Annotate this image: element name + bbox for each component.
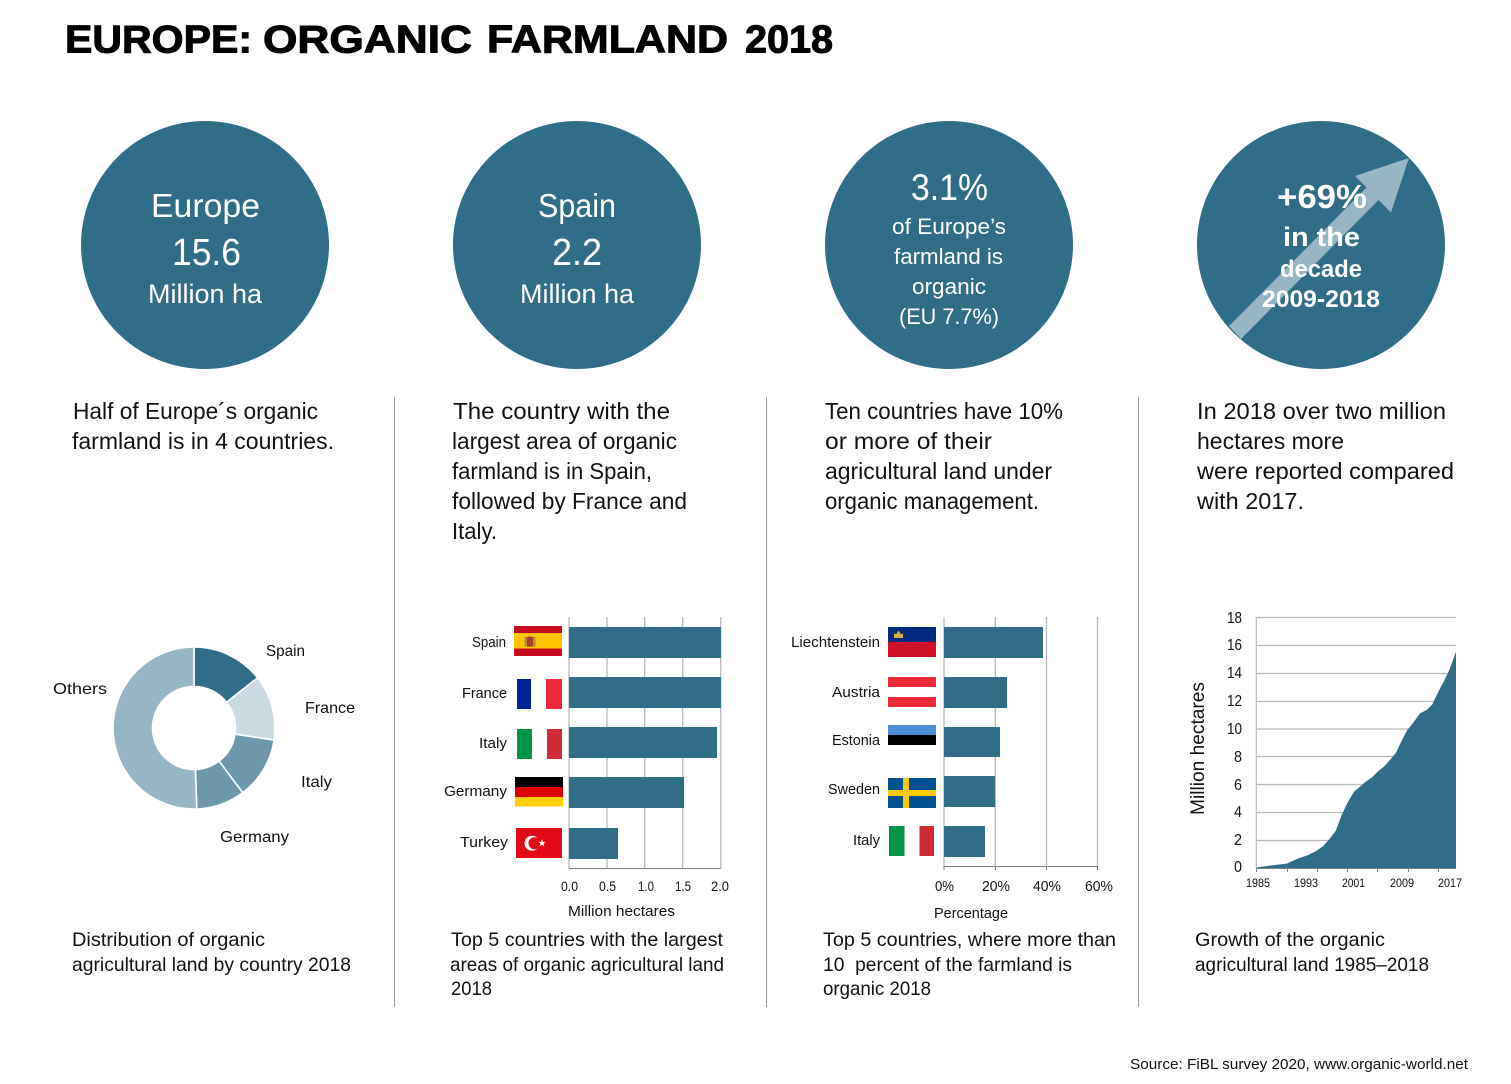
bar chart: top 5 by share of farmland: Liechtenstein xyxy=(791,635,880,651)
icon: upward arrow xyxy=(1229,158,1409,339)
caption: distribution: agricultural land by country 2018 xyxy=(72,954,351,976)
area chart: growth 1985-2018: 8 xyxy=(1234,749,1242,766)
bar chart: top 5 by share of farmland: Italy xyxy=(853,833,881,849)
caption: growth xyxy=(1195,929,1429,976)
area chart: growth 1985-2018: 6 xyxy=(1234,777,1242,794)
bar chart: top 5 by share of farmland: Austria xyxy=(832,685,881,701)
flag: Italy xyxy=(889,826,934,856)
bar chart: top 5 by share of farmland: 40% xyxy=(1033,879,1061,895)
bar chart: top 5 largest area xyxy=(444,617,729,920)
text block: two million hectares more: with 2017. xyxy=(1196,488,1304,514)
caption: top 5 share: Top 5 countries, where more than xyxy=(823,929,1116,951)
bar chart: top 5 largest area: 1.0 xyxy=(638,879,654,894)
flag: Germany xyxy=(515,777,563,806)
text block: Spain largest area: farmland is in Spain, xyxy=(452,458,652,484)
bar chart: top 5 by share of farmland xyxy=(791,617,1113,922)
bar chart: top 5 largest area: 0.5 xyxy=(599,879,616,894)
caption: top 5 largest: areas of organic agricultural land xyxy=(450,954,724,976)
bar chart: top 5 by share of farmland: Estonia xyxy=(832,733,881,749)
area chart: growth 1985-2018: 2001 xyxy=(1342,876,1365,890)
flag: Sweden xyxy=(888,778,936,808)
bar chart: top 5 largest area: Germany xyxy=(444,784,508,800)
circle: 3.1% of Europe's farmland: farmland is xyxy=(894,244,1003,269)
caption: top 5 largest: 2018 xyxy=(451,978,492,1000)
title: FARMLAND xyxy=(487,19,728,62)
text block: Spain largest area: Italy. xyxy=(452,518,497,544)
circle: 3.1% of Europe's farmland: organic xyxy=(912,274,986,299)
circle: +69% growth with arrow: +69% xyxy=(1277,178,1367,215)
caption: top 5 share xyxy=(823,929,1116,1000)
circle: 3.1% of Europe's farmland: 3.1% xyxy=(911,167,988,208)
circle: +69% growth with arrow xyxy=(1197,121,1445,369)
flag: Italy xyxy=(517,729,562,759)
area chart: growth 1985-2018: 2017 xyxy=(1438,876,1462,890)
circle: 3.1% of Europe's farmland xyxy=(825,121,1073,369)
bar chart: top 5 largest area: 0.0 xyxy=(561,879,578,894)
area chart: growth 1985-2018 xyxy=(1188,610,1462,890)
caption: distribution: Distribution of organic xyxy=(72,929,265,951)
bar chart: top 5 largest area: Spain xyxy=(472,635,506,651)
text block: half of Europe's farmland: Half of Europe´s organic xyxy=(73,398,318,424)
flag: Liechtenstein xyxy=(888,627,936,657)
circle: +69% growth with arrow: decade xyxy=(1280,256,1362,283)
donut chart: distribution by country xyxy=(53,643,355,846)
caption: top 5 share: organic 2018 xyxy=(823,978,931,1000)
area chart: growth 1985-2018: 10 xyxy=(1227,721,1242,738)
area chart: growth 1985-2018: 12 xyxy=(1227,693,1242,710)
flag: Austria xyxy=(888,677,936,707)
circle: Europe 15.6 million ha: 15.6 xyxy=(172,232,241,274)
bar chart: top 5 largest area: Italy xyxy=(479,736,508,752)
bar chart: top 5 by share of farmland: 0% xyxy=(935,879,954,895)
segment: Germany xyxy=(195,761,243,809)
bar chart: top 5 largest area: Turkey xyxy=(460,835,509,851)
flag: Turkey xyxy=(516,828,562,858)
segment: France xyxy=(227,678,275,740)
text block: ten countries: Ten countries have 10% xyxy=(825,398,1063,424)
circle: Europe 15.6 million ha xyxy=(81,121,329,369)
text block: half of Europe's farmland: farmland is in 4 countries. xyxy=(72,428,334,454)
circle: +69% growth with arrow: 2009-2018 xyxy=(1262,286,1380,313)
bar chart: top 5 largest area: France xyxy=(462,686,507,702)
title: ORGANIC xyxy=(263,19,472,62)
text block: Spain largest area: largest area of organic xyxy=(452,428,677,454)
circle: Spain 2.2 million ha: Spain xyxy=(538,187,616,224)
text block: two million hectares more: hectares more xyxy=(1197,428,1344,454)
area chart: growth 1985-2018: Million hectares xyxy=(1188,682,1209,815)
text block: ten countries: agricultural land under xyxy=(825,458,1052,484)
caption: top 5 share: 10 percent of the farmland is xyxy=(823,954,1072,976)
circle: 3.1% of Europe's farmland: (EU 7.7%) xyxy=(899,304,999,329)
circle: Spain 2.2 million ha: 2.2 xyxy=(552,232,602,274)
bar chart: top 5 by share of farmland: Percentage xyxy=(934,906,1008,922)
area chart: growth 1985-2018: 2009 xyxy=(1390,876,1414,890)
area chart: growth 1985-2018: 0 xyxy=(1234,859,1242,876)
flag: Estonia xyxy=(888,725,936,745)
text block: Spain largest area: The country with the xyxy=(453,398,670,424)
source: Source: FiBL survey 2020, www.organic-world.net xyxy=(1130,1056,1469,1073)
donut chart: distribution by country: Spain xyxy=(266,643,305,660)
text block: Spain largest area xyxy=(452,398,687,544)
flag: France xyxy=(517,679,562,709)
caption: growth: Growth of the organic xyxy=(1195,929,1385,951)
text block: ten countries: or more of their xyxy=(825,428,992,454)
text block: ten countries xyxy=(825,398,1063,514)
segment: Others xyxy=(113,647,197,809)
title: 2018 xyxy=(745,19,833,62)
circle: Spain 2.2 million ha xyxy=(453,121,701,369)
text block: two million hectares more xyxy=(1196,398,1454,514)
area chart: growth 1985-2018: 2 xyxy=(1234,832,1242,849)
donut chart: distribution by country: Others xyxy=(53,681,107,698)
caption: top 5 largest xyxy=(450,929,724,1000)
circle: Europe 15.6 million ha: Million ha xyxy=(148,279,263,309)
bar chart: top 5 largest area: 2.0 xyxy=(711,879,729,894)
donut chart: distribution by country: France xyxy=(305,700,355,717)
text block: half of Europe's farmland xyxy=(72,398,334,454)
text block: two million hectares more: In 2018 over two million xyxy=(1197,398,1446,424)
area chart: growth 1985-2018: 1993 xyxy=(1294,876,1318,890)
donut chart: distribution by country: Germany xyxy=(220,829,289,846)
circle: +69% growth with arrow: in the xyxy=(1283,222,1360,252)
caption: distribution xyxy=(72,929,351,976)
area chart: growth 1985-2018: 4 xyxy=(1234,804,1242,821)
segment: Italy xyxy=(219,734,274,793)
flag: Spain xyxy=(514,626,562,656)
area chart: growth 1985-2018: 18 xyxy=(1227,610,1242,627)
circle: Europe 15.6 million ha: Europe xyxy=(151,187,260,224)
caption: growth: agricultural land 1985–2018 xyxy=(1195,954,1429,976)
bar chart: top 5 by share of farmland: 20% xyxy=(982,879,1010,895)
bar chart: top 5 largest area: 1.5 xyxy=(675,879,691,894)
title xyxy=(65,19,833,62)
circle: Spain 2.2 million ha: Million ha xyxy=(520,279,635,309)
bar chart: top 5 by share of farmland: 60% xyxy=(1085,879,1113,895)
area chart: growth 1985-2018: 1985 xyxy=(1246,876,1270,890)
area chart: growth 1985-2018: 14 xyxy=(1227,665,1242,682)
text block: two million hectares more: were reported compared xyxy=(1196,458,1454,484)
text block: Spain largest area: followed by France and xyxy=(452,488,687,514)
bar chart: top 5 largest area: Million hectares xyxy=(568,904,675,920)
segment: Spain xyxy=(194,647,258,702)
donut chart: distribution by country: Italy xyxy=(301,774,332,791)
bar chart: top 5 by share of farmland: Sweden xyxy=(828,782,880,798)
circle: 3.1% of Europe's farmland: of Europe’s xyxy=(892,214,1006,239)
title: EUROPE: xyxy=(65,19,252,62)
text block: ten countries: organic management. xyxy=(825,488,1039,514)
area chart: growth 1985-2018: 16 xyxy=(1227,637,1242,654)
caption: top 5 largest: Top 5 countries with the largest xyxy=(451,929,724,951)
